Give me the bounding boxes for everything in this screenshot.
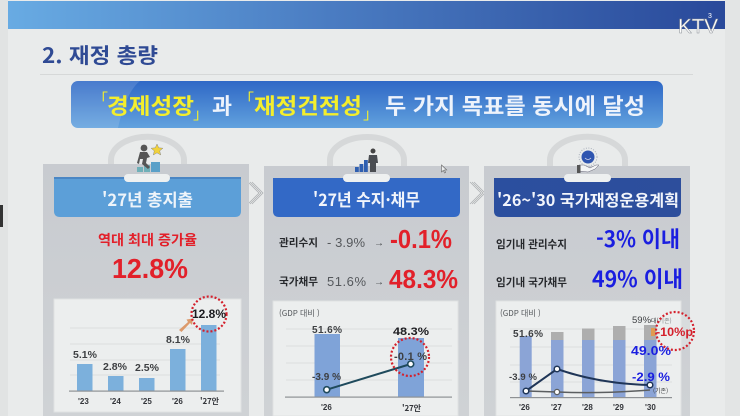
bar chart: expenditure growth: '26: [172, 397, 183, 406]
banner: dual goals: 」: [193, 103, 208, 124]
panel: 2027 balance and debt: [264, 137, 469, 416]
arrow: growth highlight: [179, 318, 193, 332]
banner: dual goals: 과: [212, 89, 232, 121]
arrow: panel 2 to panel 3: [470, 182, 485, 204]
icon: hand holding smiling globe: [577, 148, 599, 173]
banner: dual goals: 두 가지 목표를 동시에 달성: [385, 89, 645, 121]
header: 2026-2030 plan: [494, 174, 681, 217]
bar chart: expenditure growth: 2.5%: [135, 362, 160, 374]
combo chart: GDP ratio: [273, 301, 458, 416]
combo chart: five-year plan: 59%: [632, 315, 652, 326]
12.8 percent figure: 12.8%: [112, 253, 188, 284]
callout: -0.1 percent circle: [391, 338, 429, 376]
national debt row: 국가채무: [279, 274, 318, 289]
combo chart: five-year plan: (GDP 대비 ): [500, 308, 541, 319]
term balance row: -3% 이내: [596, 222, 680, 254]
header: 2027 balance and debt: [273, 174, 460, 217]
combo chart: GDP ratio: 51.6%: [312, 325, 342, 336]
title: 2. 재정 총량: [42, 40, 158, 70]
combo chart: five-year plan: '30: [645, 403, 656, 412]
header: 2027 total expenditure: '27년 총지출: [102, 186, 193, 211]
combo chart: GDP ratio: 48.3%: [393, 326, 429, 338]
term debt row: [496, 262, 683, 294]
term balance row: 임기내 관리수지: [496, 236, 567, 252]
header band: [8, 1, 725, 29]
bar chart: expenditure growth: 5.1%: [73, 349, 98, 361]
combo chart: five-year plan: (기존): [653, 386, 668, 395]
banner: dual goals: [71, 81, 663, 128]
arrow: panel 1 to panel 2: [248, 182, 263, 204]
national debt row: [279, 264, 458, 294]
KTV logo: KTV: [678, 16, 719, 38]
banner: dual goals: 「: [93, 88, 108, 109]
banner: dual goals: 」: [363, 103, 378, 124]
combo chart: five-year plan: '26: [519, 403, 530, 412]
combo chart: five-year plan: 51.6%: [513, 329, 543, 340]
bar chart: expenditure growth: 2.8%: [103, 361, 128, 373]
callout: -10 percent point circle: -10%p: [656, 325, 693, 339]
bar chart: expenditure growth: '23: [78, 397, 89, 406]
banner: dual goals: 재정건전성: [254, 89, 362, 121]
banner: dual goals: 경제성장: [107, 89, 194, 121]
combo chart: five-year plan: '27: [551, 403, 562, 412]
managed balance row: [279, 224, 452, 254]
callout: 12.8 percent circle: 12.8%: [192, 309, 226, 321]
combo chart: GDP ratio: '27안: [402, 403, 422, 414]
term balance row: [496, 222, 680, 254]
icon: climbing person and star: [137, 144, 163, 172]
bar chart: expenditure growth: [54, 296, 241, 412]
combo chart: GDP ratio: '26: [321, 403, 332, 412]
managed balance row: -0.1%: [390, 224, 452, 254]
bar chart: expenditure growth: '27안: [200, 396, 220, 407]
combo chart: five-year plan: '29: [613, 403, 624, 412]
header: 2027 balance and debt: '27년 수지·채무: [313, 186, 420, 211]
callout: -0.1 percent circle: -0.1 %: [394, 351, 427, 363]
national debt row: 51.6%: [327, 274, 366, 289]
banner: dual goals: 「: [239, 88, 254, 109]
managed balance row: - 3.9%: [327, 235, 365, 250]
header: 2027 total expenditure: [54, 174, 241, 217]
combo chart: GDP ratio: (GDP 대비 ): [279, 308, 320, 319]
bar chart: expenditure growth: '24: [110, 397, 121, 406]
combo chart: five-year plan: 대(기존): [651, 316, 672, 325]
term debt row: 49% 이내: [592, 262, 683, 294]
panel: 2026-2030 fiscal plan: [484, 137, 694, 416]
term debt row: 임기내 국가채무: [496, 274, 567, 290]
record growth rate: 역대 최대 증가율: [98, 230, 197, 250]
combo chart: five-year plan: -3.9 %: [509, 372, 538, 383]
icon: mouse cursor: [442, 165, 447, 173]
callout: 12.8 percent circle: [192, 296, 226, 332]
combo chart: five-year plan: -2.9 %: [632, 370, 670, 384]
national debt row: →: [374, 277, 384, 288]
national debt row: 48.3%: [389, 264, 458, 294]
managed balance row: →: [374, 238, 384, 249]
header: 2026-2030 plan: '26~'30 국가재정운용계획: [497, 187, 679, 211]
bar chart: expenditure growth: 8.1%: [166, 334, 191, 346]
bar chart: expenditure growth: '25: [141, 397, 152, 406]
combo chart: five-year plan: '28: [582, 403, 593, 412]
managed balance row: 관리수지: [279, 235, 318, 250]
combo chart: five-year plan: [496, 301, 694, 416]
KTV logo: 3: [708, 13, 712, 20]
icon: person and bar graph: [355, 148, 378, 172]
panel: total expenditure: [43, 137, 249, 416]
callout: -10 percent point circle: [651, 312, 694, 350]
combo chart: five-year plan: 49.0%: [631, 343, 671, 358]
combo chart: GDP ratio: -3.9 %: [312, 372, 341, 383]
